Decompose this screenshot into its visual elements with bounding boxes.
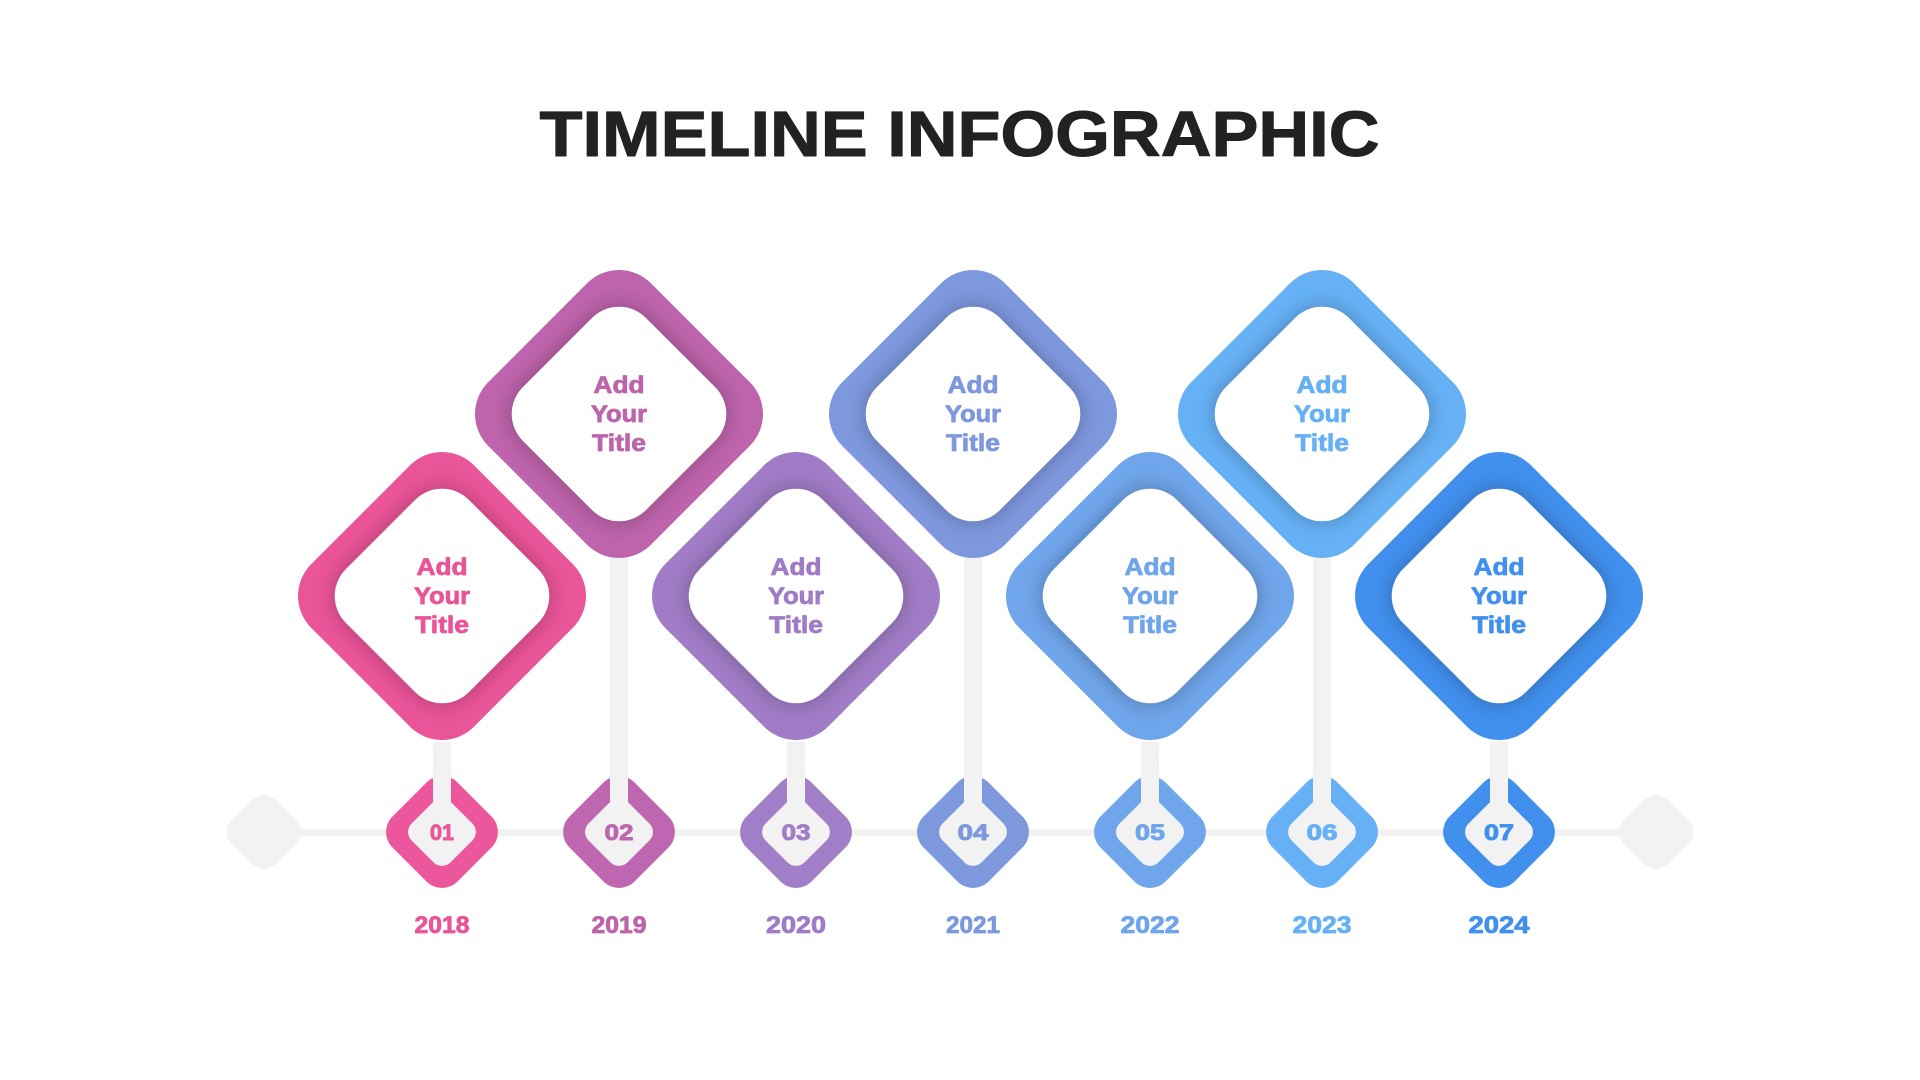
- title diamond 07: [1355, 452, 1643, 740]
- milestone 05: 2022: [1006, 452, 1294, 934]
- number badge 02: 02: [604, 820, 634, 845]
- title diamond 04: Add: [948, 372, 998, 399]
- title diamond 01: Add: [416, 554, 468, 581]
- title diamond 04: [829, 270, 1117, 558]
- number badge 05: [1085, 742, 1215, 897]
- title diamond 05: Title: [1123, 612, 1177, 639]
- milestone 02: 2019: [456, 251, 782, 939]
- milestone 06: 2023: [1159, 251, 1485, 939]
- left end marker: [220, 788, 308, 876]
- year 2024: 2024: [1468, 912, 1530, 939]
- title diamond 03: [652, 452, 940, 740]
- milestone 04: 2021: [810, 251, 1136, 939]
- title: TIMELINE INFOGRAPHIC: [540, 98, 1380, 170]
- title diamond 05: Add: [1124, 554, 1176, 581]
- title diamond 06: Your: [1294, 401, 1350, 428]
- title diamond 02: Title: [592, 430, 646, 457]
- milestone 07: 2024: [1355, 452, 1643, 934]
- number badge 07: 07: [1484, 820, 1514, 845]
- title diamond 03: Your: [768, 583, 824, 610]
- year 2021: 2021: [946, 912, 1000, 939]
- title diamond 03: Add: [770, 554, 822, 581]
- title diamond 03: Title: [769, 612, 823, 639]
- year 2018: 2018: [414, 912, 470, 939]
- number badge 06: 06: [1306, 820, 1338, 845]
- title diamond 01: Your: [414, 583, 470, 610]
- milestone 01: 2018: [298, 452, 586, 934]
- title diamond 06: Add: [1296, 372, 1348, 399]
- title diamond 06: Title: [1295, 430, 1349, 457]
- title diamond 02: [475, 270, 763, 558]
- title diamond 07: Title: [1472, 612, 1526, 639]
- title diamond 07: Your: [1471, 583, 1527, 610]
- year 2019: 2019: [592, 912, 646, 939]
- milestone 03: 2020: [652, 452, 940, 934]
- number badge 03: 03: [782, 820, 810, 845]
- title diamond 07: Add: [1474, 554, 1524, 581]
- number badge 06: [1257, 552, 1387, 897]
- number badge 04: 04: [957, 820, 989, 845]
- timeline axis line: [264, 829, 1656, 836]
- title diamond 01: [298, 452, 586, 740]
- year 2023: 2023: [1292, 912, 1352, 939]
- title diamond 06: [1178, 270, 1466, 558]
- title diamond 05: [1006, 452, 1294, 740]
- number badge 07: [1434, 742, 1564, 897]
- number badge 01: [377, 742, 507, 897]
- number badge 04: [908, 552, 1038, 897]
- title diamond 02: Your: [591, 401, 647, 428]
- title diamond 04: Your: [945, 401, 1001, 428]
- number badge 05: 05: [1135, 820, 1165, 845]
- right end marker: [1612, 788, 1700, 876]
- number badge 03: [731, 742, 861, 897]
- year 2020: 2020: [766, 912, 826, 939]
- title diamond 05: Your: [1122, 583, 1178, 610]
- title diamond 01: Title: [415, 612, 469, 639]
- title diamond 02: Add: [594, 372, 644, 399]
- number badge 01: 01: [430, 820, 454, 845]
- number badge 02: [554, 552, 684, 897]
- title diamond 04: Title: [946, 430, 1000, 457]
- year 2022: 2022: [1120, 912, 1180, 939]
